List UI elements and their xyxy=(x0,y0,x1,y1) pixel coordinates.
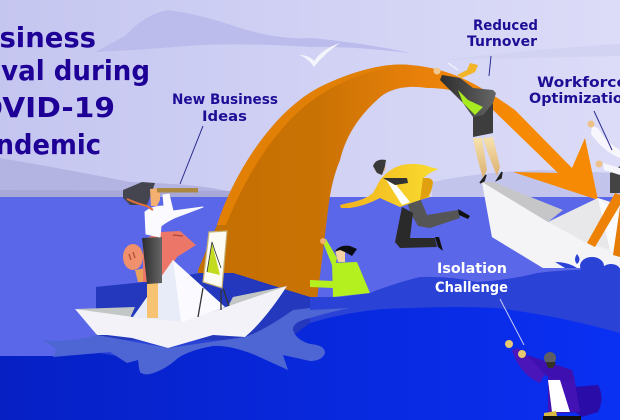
businessman on right boat xyxy=(587,120,620,257)
callout: Reduced Turnover: Turnover xyxy=(467,34,537,50)
easel with chart xyxy=(198,231,229,317)
callout: Reduced Turnover xyxy=(467,18,538,76)
splash xyxy=(555,254,620,276)
falling businessman in yellow xyxy=(340,160,470,251)
callout: Workforce Optimization xyxy=(529,75,620,150)
callout: New Business Ideas: Ideas xyxy=(202,109,247,125)
callout: Isolation Challenge: Isolation xyxy=(437,261,507,277)
callout: Workforce Optimization: Workforce xyxy=(537,75,620,91)
callout: New Business Ideas xyxy=(172,92,278,184)
light wave crest xyxy=(43,308,350,374)
left piggy bank xyxy=(123,231,196,282)
right paper boat xyxy=(482,182,620,268)
deep blue foreground water xyxy=(0,307,620,420)
orange arch arrow xyxy=(198,64,598,300)
callout: Reduced Turnover: Reduced xyxy=(473,18,538,34)
mid-blue wave xyxy=(96,269,620,360)
man in purple reaching up xyxy=(505,340,602,420)
left dark wave panel xyxy=(96,273,310,340)
callout: New Business Ideas: New Business xyxy=(172,92,278,108)
sea xyxy=(0,197,620,420)
businesswoman on top of arch xyxy=(434,63,502,183)
distant mountains xyxy=(0,10,620,198)
left paper boat xyxy=(75,260,287,348)
callout: Isolation Challenge: Challenge xyxy=(435,280,508,296)
callout: Isolation Challenge xyxy=(435,261,524,345)
woman in lime in water xyxy=(310,238,370,297)
businesswoman with telescope xyxy=(123,182,203,318)
sky background xyxy=(0,0,620,198)
icon: white bird xyxy=(299,43,340,67)
title xyxy=(0,21,150,161)
